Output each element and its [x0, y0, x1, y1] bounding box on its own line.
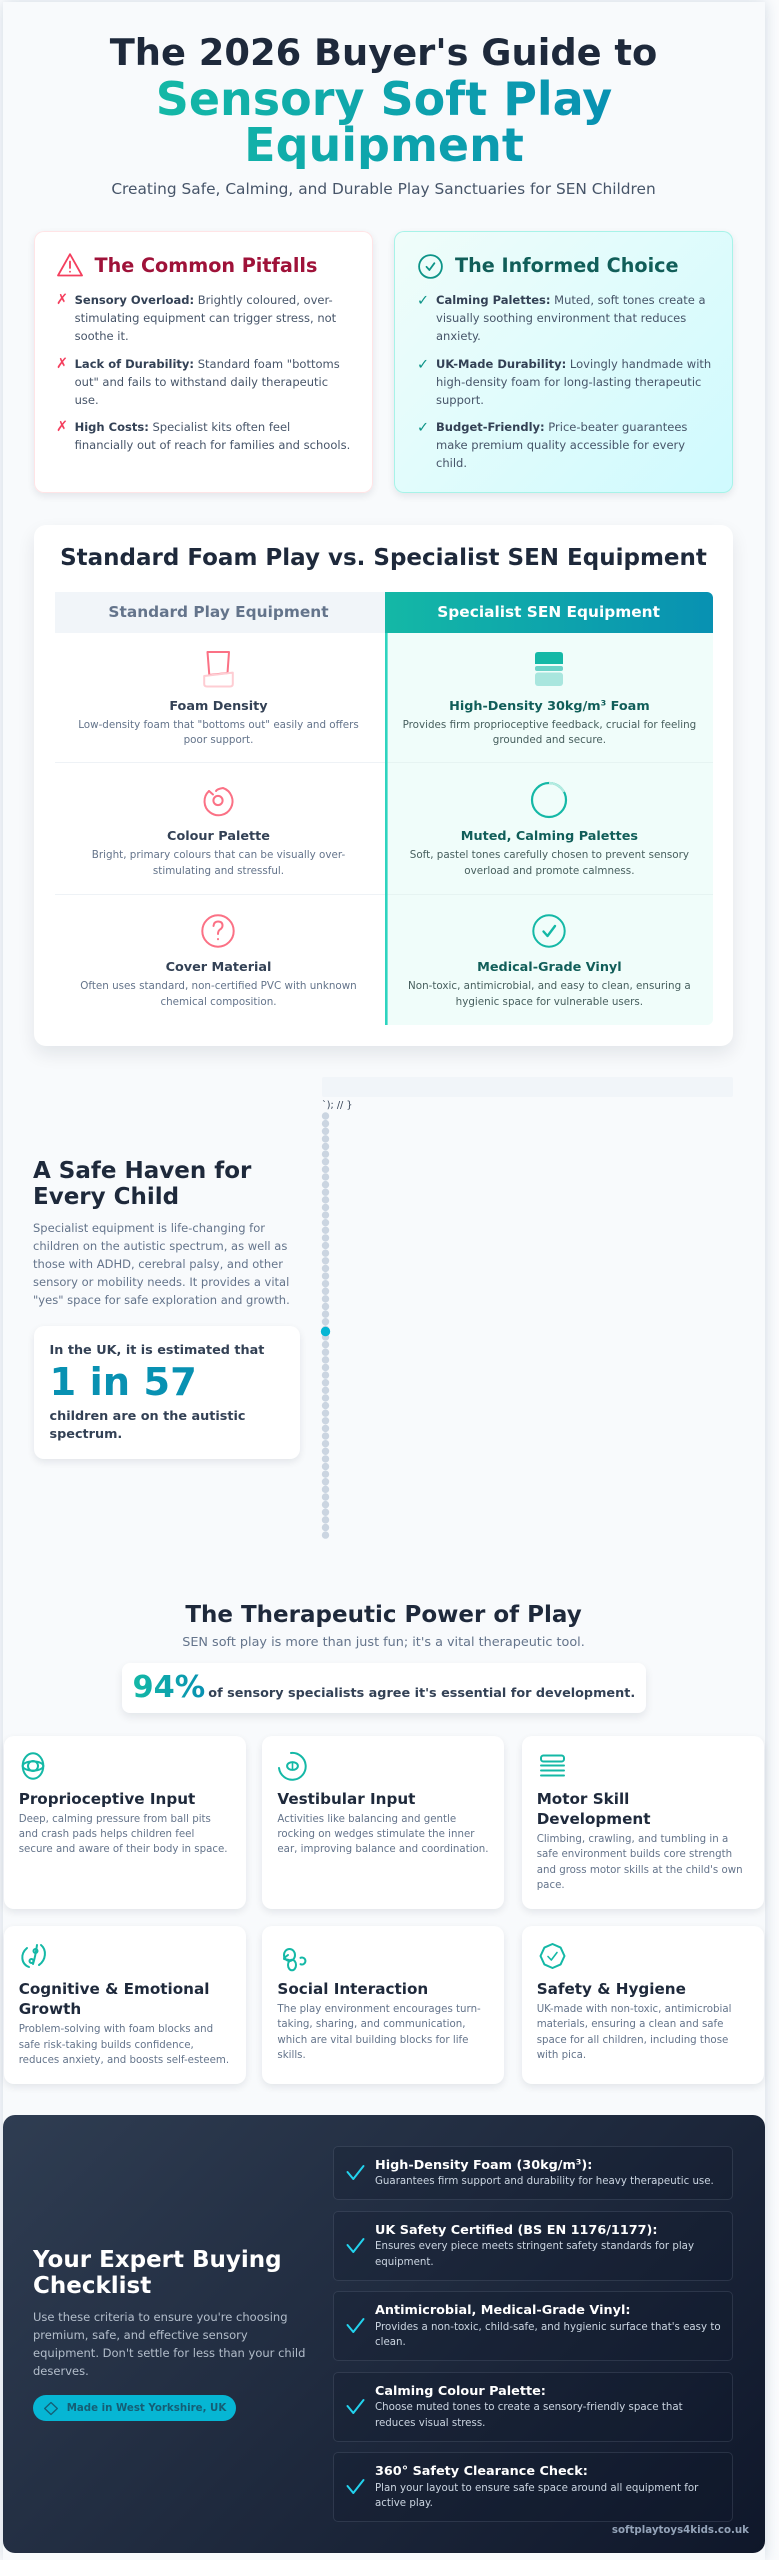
row: colour palette standard: stimulating and stressful. — [153, 865, 284, 877]
item: uk safety certified — [333, 2211, 733, 2281]
dotted vertical map — [320, 1112, 330, 1539]
card: proprioceptive input: secure and aware of their body in space. — [19, 1843, 228, 1855]
title highlighted text: Equipment — [244, 118, 524, 172]
item: uk safety certified: UK Safety Certified (BS EN 1176/1177): — [375, 2223, 658, 2238]
item: antimicrobial vinyl — [333, 2291, 733, 2361]
card: safety and hygiene: materials, ensuring a clean and safe — [537, 2018, 723, 2030]
safe haven paragraph: those with ADHD, cerebral palsy, and other — [33, 1257, 283, 1271]
card: motor skill development: Motor Skill — [537, 1790, 629, 1808]
icon: stacked mats — [540, 1754, 565, 1776]
card: vestibular input: rocking on wedges stimulate the inner — [277, 1828, 475, 1840]
item: uk-made durability: ✓ — [417, 357, 429, 373]
item: sensory overload: ✗ — [56, 292, 68, 308]
card: safety and hygiene: UK-made with non-toxic, antimicrobial — [537, 2003, 731, 2015]
stat card: 1 in 57: spectrum. — [50, 1427, 122, 1442]
card: proprioceptive input: and crash pads helps children feel — [19, 1828, 194, 1840]
safe haven heading: Every Child — [33, 1184, 179, 1210]
icon: sagging foam — [203, 651, 234, 688]
checklist intro paragraph: Use these criteria to ensure you're choosing — [33, 2310, 288, 2324]
card: safety and hygiene: Safety & Hygiene — [537, 1980, 686, 1998]
item: calming palettes: visually soothing environment that reduces — [436, 311, 686, 325]
card: motor skill development: and gross motor skills at the child's own — [537, 1864, 743, 1876]
item: 360 safety clearance — [333, 2452, 733, 2522]
row: colour palette specialist — [385, 763, 713, 895]
item: budget-friendly: make premium quality accessible for every — [436, 438, 685, 452]
item: uk-made durability — [417, 357, 711, 407]
row: colour palette specialist: overload and promote calmness. — [464, 865, 634, 877]
stat card: 1 in 57: children are on the autistic — [50, 1409, 245, 1424]
card: safety and hygiene: space for all children, including those — [537, 2034, 728, 2046]
row: colour palette standard — [55, 763, 385, 895]
checklist intro paragraph: deserves. — [33, 2364, 89, 2378]
item: high costs: High Costs: Specialist kits often feel — [75, 420, 290, 434]
card: social interaction — [262, 1926, 504, 2084]
comparison table — [55, 592, 713, 1025]
item: budget-friendly: ✓ — [417, 420, 429, 436]
checklist intro paragraph — [33, 2310, 305, 2378]
header: title and subtitle — [110, 31, 657, 198]
icon: check shield — [532, 914, 566, 948]
column header: standard: Standard Play Equipment — [108, 603, 329, 621]
subheading: SEN soft play is more than just fun; it's a vital therapeutic tool. — [182, 1635, 585, 1650]
safe haven paragraph — [33, 1221, 290, 1307]
placeholder bar — [322, 1077, 733, 1097]
card: cognitive and emotional growth: Growth — [19, 2000, 81, 2018]
item: lack of durability: ✗ — [56, 356, 68, 372]
subtitle: Creating Safe, Calming, and Durable Play Sanctuaries for SEN Children — [111, 180, 656, 198]
row: colour palette specialist: Muted, Calming Palettes — [461, 829, 638, 844]
card: proprioceptive input: Deep, calming pressure from ball pits — [19, 1813, 211, 1825]
row: foam density specialist — [385, 633, 713, 763]
row: cover material specialist: Medical-Grade Vinyl — [477, 960, 622, 975]
item: high-density foam: High-Density Foam (30kg/m³): — [375, 2158, 592, 2173]
icon: check — [346, 2399, 364, 2414]
item: high-density foam — [333, 2146, 733, 2200]
icon: check — [346, 2238, 364, 2253]
item: lack of durability — [56, 356, 340, 407]
icon: check — [346, 2479, 364, 2494]
icon: high density foam layers — [535, 652, 563, 686]
item: sensory overload: soothe it. — [75, 329, 129, 343]
row: foam density specialist: Provides firm proprioceptive feedback, crucial for feeling — [403, 719, 696, 731]
card: safety and hygiene: with pica. — [537, 2049, 586, 2061]
row: colour palette standard: Bright, primary colours that can be visually over- — [92, 849, 345, 861]
icon: warning triangle — [57, 253, 83, 276]
checklist heading: Checklist — [33, 2272, 151, 2298]
card: motor skill development: pace. — [537, 1879, 565, 1891]
card: cognitive and emotional growth: Cognitive & Emotional — [19, 1980, 209, 1998]
checklist heading — [32, 2246, 282, 2298]
item: uk safety certified: equipment. — [375, 2256, 434, 2268]
card: cognitive and emotional growth — [4, 1926, 246, 2084]
card: vestibular input: Vestibular Input — [277, 1790, 415, 1808]
card: safety and hygiene — [522, 1926, 764, 2084]
item: sensory overload: Sensory Overload: Brightly coloured, over- — [75, 293, 333, 307]
icon: question mark — [201, 914, 235, 948]
item: 360 safety clearance: Plan your layout to ensure safe space around all equipment for — [375, 2482, 698, 2494]
column header: specialist: Specialist SEN Equipment — [437, 603, 660, 621]
item: calming palettes: ✓ — [417, 293, 429, 309]
safe haven paragraph: Specialist equipment is life-changing for — [33, 1221, 265, 1235]
title highlighted text: Sensory Soft Play — [156, 72, 612, 126]
icon: check circle — [418, 254, 443, 279]
item: antimicrobial vinyl: clean. — [375, 2336, 406, 2348]
heading: The Common Pitfalls — [94, 254, 317, 277]
item: uk-made durability: high-density foam for long-lasting therapeutic — [436, 375, 701, 389]
safe haven heading: A Safe Haven for — [33, 1158, 251, 1184]
card: motor skill development: Climbing, crawling, and tumbling in a — [537, 1833, 728, 1845]
icon: balance ear — [278, 1752, 307, 1781]
item: calming colour palette: Choose muted tones to create a sensory-friendly space that — [375, 2401, 683, 2413]
card: motor skill development: Development — [537, 1810, 651, 1828]
icon: people talking — [283, 1948, 306, 1972]
icon: diamond — [44, 2402, 58, 2416]
panel: comparison table — [34, 525, 732, 1046]
heading: The Informed Choice — [455, 254, 679, 277]
item: sensory overload: stimulating equipment can trigger stress, not — [75, 311, 336, 325]
item: calming colour palette — [333, 2372, 733, 2442]
item: budget-friendly: Budget-Friendly: Price-beater guarantees — [436, 420, 687, 434]
section: safe haven text — [33, 1158, 301, 1463]
item: lack of durability: out" and fails to withstand daily therapeutic — [75, 375, 328, 389]
card: proprioceptive input — [4, 1736, 246, 1909]
safe haven paragraph: sensory or mobility needs. It provides a vital — [33, 1275, 289, 1289]
stat card: 1 in 57: In the UK, it is estimated that — [50, 1343, 264, 1358]
card: social interaction: Social Interaction — [277, 1980, 428, 1998]
row: foam density standard: Foam Density — [169, 699, 268, 714]
item: calming palettes: anxiety. — [436, 329, 481, 343]
item: uk safety certified: Ensures every piece meets stringent safety standards for play — [375, 2240, 694, 2252]
row: foam density standard: Low-density foam that "bottoms out" easily and offers — [78, 719, 359, 731]
item: uk-made durability: UK-Made Durability: Lovingly handmade with — [436, 357, 711, 371]
item: high costs — [56, 419, 350, 452]
badge: made in west yorkshire: Made in West Yorkshire, UK — [67, 2402, 226, 2414]
safe haven paragraph: "yes" space for safe exploration and growth. — [33, 1293, 290, 1307]
item: calming colour palette: Calming Colour Palette: — [375, 2384, 546, 2399]
row: colour palette standard: Colour Palette — [167, 829, 270, 844]
row: cover material specialist — [385, 895, 713, 1025]
item: lack of durability: Lack of Durability: Standard foam "bottoms — [75, 357, 340, 371]
icon: check — [346, 2318, 364, 2333]
stat text: of sensory specialists agree it's essential for development. — [208, 1686, 635, 1701]
item: calming palettes: Calming Palettes: Muted, soft tones create a — [436, 293, 706, 307]
panel: expert buying checklist — [2, 2115, 765, 2553]
column header: standard — [55, 592, 385, 633]
row: foam density standard: poor support. — [184, 734, 253, 746]
item: high-density foam: Guarantees firm support and durability for heavy therapeutic use. — [375, 2175, 714, 2187]
title highlighted text — [155, 76, 613, 169]
item: antimicrobial vinyl: Provides a non-toxic, child-safe, and hygienic surface that's easy to — [375, 2321, 721, 2333]
row: cover material standard — [80, 914, 357, 1008]
badge: made in west yorkshire — [33, 2395, 236, 2421]
card: social interaction: The play environment encourages turn- — [277, 2003, 481, 2015]
card: vestibular input — [262, 1736, 504, 1909]
checklist heading: Your Expert Buying — [33, 2246, 282, 2272]
row: cover material standard: chemical composition. — [160, 996, 277, 1008]
stray code text: `); // } — [322, 1100, 352, 1111]
row: cover material specialist: Non-toxic, antimicrobial, and easy to clean, ensuring a — [408, 980, 691, 992]
stat callout: 94% — [122, 1663, 646, 1713]
row: cover material standard: Cover Material — [166, 960, 271, 975]
item: antimicrobial vinyl: Antimicrobial, Medical-Grade Vinyl: — [375, 2303, 630, 2318]
item: 360 safety clearance: active play. — [375, 2497, 433, 2509]
card: cognitive and emotional growth: reduces anxiety, and boosts self-esteem. — [19, 2054, 229, 2066]
item: lack of durability: use. — [75, 393, 99, 407]
section heading: therapeutic power of play — [182, 1602, 585, 1650]
row: cover material specialist: hygienic space for vulnerable users. — [456, 996, 643, 1008]
safe haven heading — [33, 1158, 252, 1210]
safe haven paragraph: children on the autistic spectrum, as well as — [33, 1239, 287, 1253]
row: foam density specialist: grounded and secure. — [493, 734, 606, 746]
checklist intro paragraph: premium, safe, and effective sensory — [33, 2328, 248, 2342]
stat card: 1 in 57 — [34, 1326, 300, 1459]
item: budget-friendly — [417, 420, 687, 470]
icon: check — [346, 2165, 364, 2180]
item: high costs: financially out of reach for families and schools. — [75, 438, 350, 452]
comparison heading: Standard Foam Play vs. Specialist SEN Equipment — [60, 545, 707, 571]
item: high costs: ✗ — [56, 419, 68, 435]
card: social interaction: skills. — [277, 2049, 306, 2061]
card: cognitive and emotional growth: safe risk-taking builds confidence, — [19, 2039, 194, 2051]
icon: badge check — [540, 1943, 566, 1969]
row: cover material standard: Often uses standard, non-certified PVC with unknown — [80, 980, 357, 992]
checklist intro paragraph: equipment. Don't settle for less than your child — [33, 2346, 305, 2360]
item: 360 safety clearance: 360° Safety Clearance Check: — [375, 2464, 588, 2479]
footer website: softplaytoys4kids.co.uk — [612, 2524, 749, 2536]
stat number: 94% — [132, 1670, 205, 1705]
item: uk-made durability: support. — [436, 393, 484, 407]
card: social interaction: taking, sharing, and communication, — [277, 2018, 465, 2030]
icon: bright colour swirl — [204, 787, 234, 816]
card: motor skill development: safe environment builds core strength — [537, 1848, 732, 1860]
item: sensory overload — [56, 292, 336, 343]
card: vestibular input: ear, improving balance and coordination. — [277, 1843, 489, 1855]
item: calming palettes — [417, 293, 706, 343]
icon: brain — [21, 1944, 46, 1968]
card: vestibular input: Activities like balancing and gentle — [277, 1813, 456, 1825]
row: foam density specialist: High-Density 30kg/m³ Foam — [449, 699, 650, 714]
card: motor skill development — [522, 1736, 764, 1909]
heading: The Therapeutic Power of Play — [185, 1602, 582, 1628]
title line one: The 2026 Buyer's Guide to — [110, 31, 657, 74]
card: cognitive and emotional growth: Problem-solving with foam blocks and — [19, 2023, 213, 2035]
panel: the informed choice — [394, 231, 733, 493]
card: social interaction: which are vital building blocks for life — [277, 2034, 468, 2046]
panel: the common pitfalls — [34, 231, 373, 493]
item: budget-friendly: child. — [436, 456, 467, 470]
item: calming colour palette: reduces visual stress. — [375, 2417, 485, 2429]
row: colour palette specialist: Soft, pastel tones carefully chosen to prevent sensory — [410, 849, 689, 861]
card: proprioceptive input: Proprioceptive Input — [19, 1790, 195, 1808]
icon: calm ring — [530, 782, 568, 818]
row: foam density standard — [55, 633, 385, 763]
icon: body pressure — [22, 1752, 44, 1780]
stat card: 1 in 57: 1 in 57 — [50, 1360, 197, 1405]
column header: specialist — [385, 592, 713, 633]
